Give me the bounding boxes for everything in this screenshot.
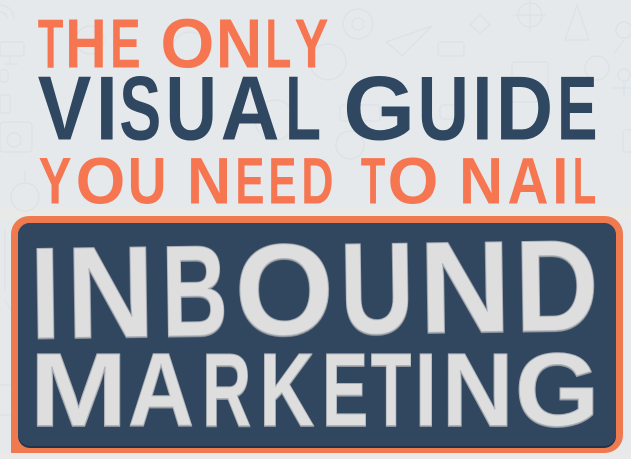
banner panel — [11, 212, 623, 453]
heading line: VISUAL GUIDE: U — [418, 58, 469, 160]
heading line: THE ONLY: O — [160, 4, 214, 82]
heading line: YOU NEED TO NAIL: O — [388, 144, 438, 218]
heading line: VISUAL GUIDE: L — [285, 58, 320, 160]
banner word: INBOUND: U — [339, 215, 415, 362]
orange banner frame — [11, 216, 623, 453]
heading line: VISUAL GUIDE: G — [343, 58, 415, 160]
heading line: VISUAL GUIDE: I — [472, 58, 492, 160]
banner word: MARKETING: N — [442, 332, 514, 448]
heading line: VISUAL GUIDE: D — [496, 58, 553, 160]
heading line: YOU NEED TO NAIL: A — [508, 144, 548, 218]
banner word: MARKETING: R — [202, 332, 251, 448]
banner word: INBOUND: I — [29, 220, 61, 366]
banner word: MARKETING: M — [30, 332, 128, 448]
heading line: THE ONLY: N — [216, 4, 262, 82]
heading line: YOU NEED TO NAIL: I — [552, 144, 568, 218]
banner word: MARKETING: G — [515, 332, 600, 448]
heading line: YOU NEED TO NAIL: E — [235, 144, 265, 218]
heading line: YOU NEED TO NAIL: D — [301, 144, 334, 218]
heading line: VISUAL GUIDE: E — [557, 58, 597, 160]
heading line: YOU NEED TO NAIL: N — [459, 144, 503, 218]
banner word: MARKETING: A — [128, 332, 194, 448]
heading line: VISUAL GUIDE: U — [166, 58, 217, 160]
heading line: YOU NEED TO NAIL: E — [268, 144, 296, 218]
heading line: THE ONLY: H — [65, 4, 107, 82]
banner word: INBOUND: N — [65, 218, 155, 366]
heading line: THE ONLY: E — [110, 4, 141, 82]
banner word: INBOUND: O — [234, 216, 335, 363]
banner word: MARKETING: I — [415, 332, 437, 448]
heading line: YOU NEED TO NAIL: U — [128, 144, 166, 218]
heading line: YOU NEED TO NAIL: L — [573, 144, 596, 218]
heading line: VISUAL GUIDE: I — [96, 58, 118, 160]
heading line: VISUAL GUIDE: V — [38, 58, 92, 160]
heading line: YOU NEED TO NAIL: N — [187, 144, 231, 218]
banner word: MARKETING: K — [259, 332, 314, 448]
heading line: YOU NEED TO NAIL: T — [361, 144, 385, 218]
heading line: VISUAL GUIDE: A — [220, 58, 280, 160]
heading line: YOU NEED TO NAIL: O — [76, 144, 125, 218]
navy banner fill — [18, 223, 616, 448]
heading line: THE ONLY: Y — [295, 4, 328, 82]
banner word: MARKETING: E — [322, 332, 368, 448]
heading line: THE ONLY: L — [265, 4, 291, 82]
banner word: INBOUND: N — [418, 213, 512, 361]
banner word: MARKETING: T — [371, 332, 411, 448]
heading line: YOU NEED TO NAIL: Y — [39, 144, 72, 218]
heading line: VISUAL GUIDE: S — [119, 58, 161, 160]
heading line: THE ONLY: T — [38, 4, 63, 82]
banner word: INBOUND: B — [161, 217, 229, 364]
banner word: INBOUND: D — [514, 212, 600, 359]
